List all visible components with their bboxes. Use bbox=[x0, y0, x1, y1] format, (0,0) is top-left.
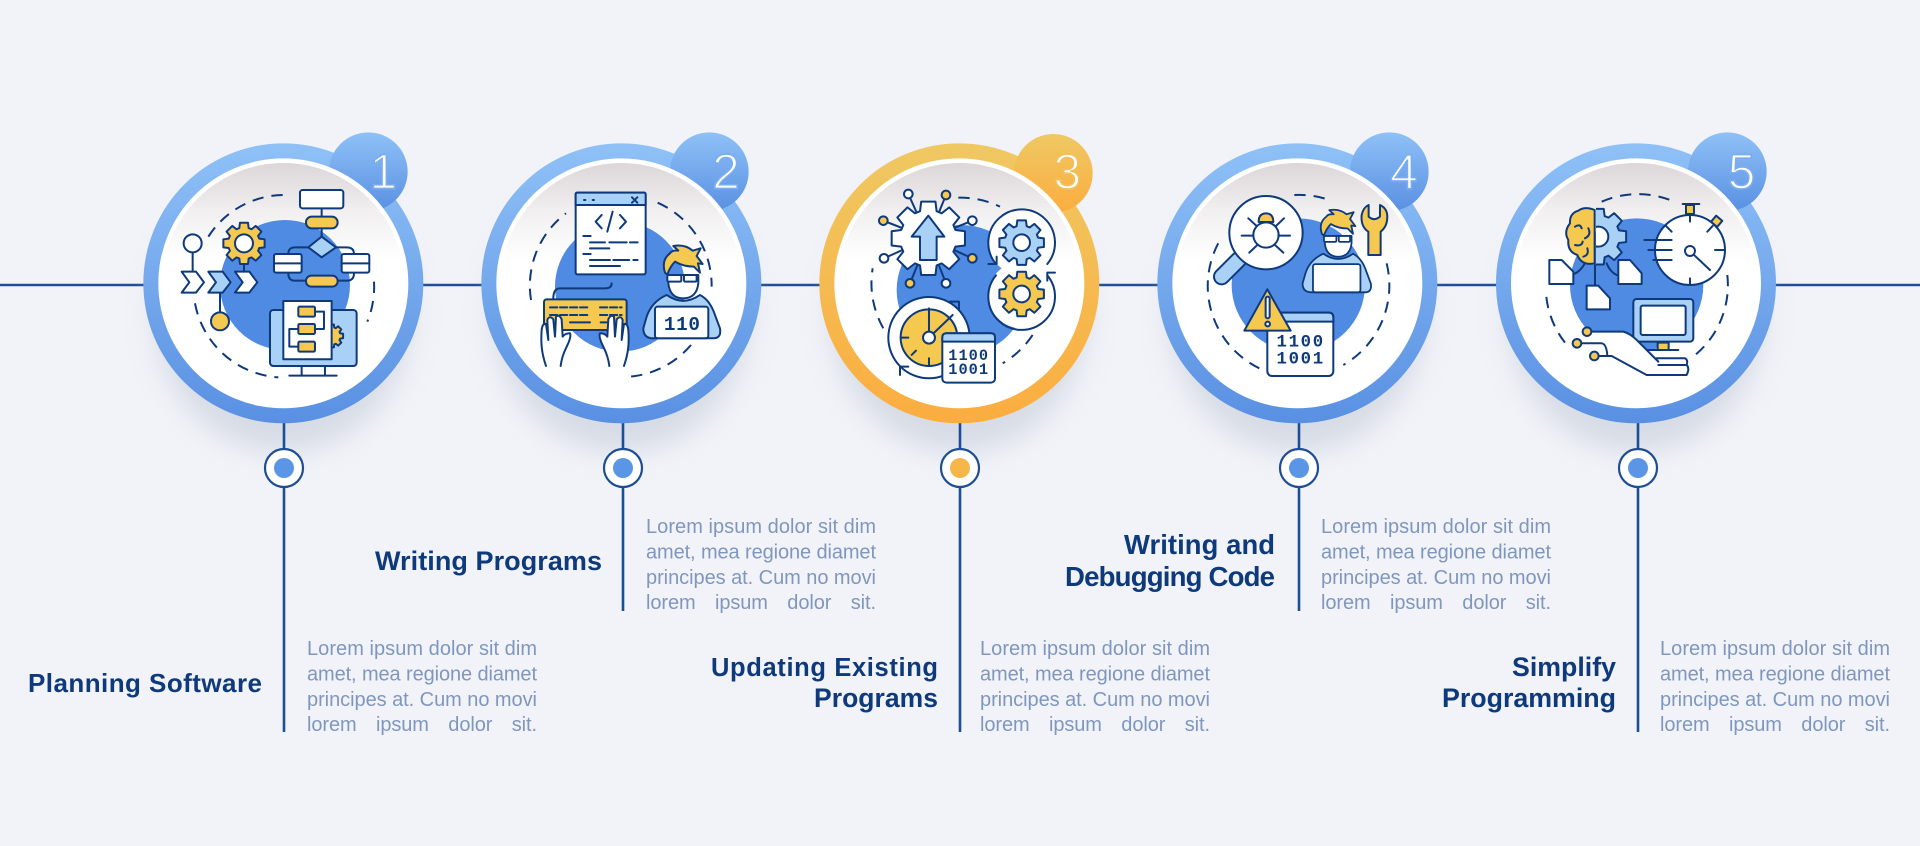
heading 4: Debugging Code bbox=[1065, 561, 1275, 592]
circle badge and icon 5: 5 bbox=[1728, 144, 1755, 199]
timeline line bbox=[0, 284, 1920, 286]
text block 5: lorem ipsum dolor sit. bbox=[1660, 714, 1890, 736]
circle badge and icon 3 bbox=[819, 134, 1099, 423]
text block 5 bbox=[1660, 638, 1890, 736]
circle shadow 2 bbox=[493, 176, 749, 452]
icon: bug search, developer and warning bbox=[1222, 196, 1387, 376]
circle shadow 1 bbox=[155, 176, 411, 452]
timeline node 3 bbox=[941, 449, 979, 487]
text block 1: amet, mea regione diamet bbox=[307, 664, 537, 686]
text block 3: principes at. Cum no movi bbox=[980, 689, 1210, 711]
circle badge and icon 4 bbox=[1157, 132, 1437, 423]
heading 5: Simplify bbox=[1512, 652, 1616, 682]
heading 5: Programming bbox=[1442, 683, 1616, 713]
circle shadow 4 bbox=[1169, 176, 1425, 452]
text block 4: Lorem ipsum dolor sit dim bbox=[1321, 516, 1551, 538]
text block 1: principes at. Cum no movi bbox=[307, 689, 537, 711]
connector stem 5 bbox=[1637, 420, 1639, 732]
panel: step 2 writing programs bbox=[375, 132, 876, 614]
connector stem 2 bbox=[622, 420, 624, 611]
text block 2 bbox=[646, 516, 876, 614]
text block 3: lorem ipsum dolor sit. bbox=[980, 714, 1210, 736]
text block 2: Lorem ipsum dolor sit dim bbox=[646, 516, 876, 538]
circle badge and icon 3: 1001 bbox=[948, 361, 989, 379]
heading 3 bbox=[711, 654, 938, 713]
circle badge and icon 1: 1 bbox=[370, 144, 397, 199]
text block 1: lorem ipsum dolor sit. bbox=[307, 714, 537, 736]
heading 3: Updating Existing bbox=[711, 654, 938, 682]
infographic canvas bbox=[0, 132, 1920, 735]
circle shadow 5 bbox=[1508, 176, 1764, 452]
heading 5 bbox=[1442, 652, 1616, 713]
text block 4: amet, mea regione diamet bbox=[1321, 542, 1551, 564]
heading 4 bbox=[1065, 529, 1275, 592]
text block 4: principes at. Cum no movi bbox=[1321, 567, 1551, 589]
heading 4: Writing and bbox=[1124, 529, 1275, 560]
timeline node 2 bbox=[604, 449, 642, 487]
panel: step 3 updating existing programs bbox=[711, 134, 1210, 736]
text block 5: Lorem ipsum dolor sit dim bbox=[1660, 638, 1890, 660]
text block 5: principes at. Cum no movi bbox=[1660, 689, 1890, 711]
text block 2: principes at. Cum no movi bbox=[646, 567, 876, 589]
circle badge and icon 4: 1001 bbox=[1277, 351, 1325, 370]
icon: update gear, cycle gears and clock bbox=[879, 190, 1055, 383]
heading 2: Writing Programs bbox=[375, 546, 602, 576]
connector stem 4 bbox=[1298, 420, 1300, 611]
icon: code window, keyboard and developer bbox=[541, 193, 720, 366]
text block 2: lorem ipsum dolor sit. bbox=[646, 592, 876, 614]
text block 1 bbox=[307, 638, 537, 736]
circle badge and icon 2: 110 bbox=[664, 314, 701, 336]
circle badge and icon 2: 2 bbox=[712, 144, 740, 199]
text block 3: amet, mea regione diamet bbox=[980, 664, 1210, 686]
connector stem 3 bbox=[959, 420, 961, 732]
circle badge and icon 5 bbox=[1496, 132, 1776, 423]
text block 1: Lorem ipsum dolor sit dim bbox=[307, 638, 537, 660]
circle badge and icon 2 bbox=[481, 132, 761, 423]
text block 3 bbox=[980, 638, 1210, 736]
circle badge and icon 4: 4 bbox=[1390, 144, 1418, 199]
circle badge and icon 3: 3 bbox=[1054, 144, 1081, 199]
text block 3: Lorem ipsum dolor sit dim bbox=[980, 638, 1210, 660]
circle badge and icon 4: 1100 bbox=[1277, 334, 1325, 353]
circle shadow 3 bbox=[831, 176, 1087, 452]
panel: step 5 simplify programming bbox=[1442, 132, 1890, 736]
timeline node 5 bbox=[1619, 449, 1657, 487]
heading 3: Programs bbox=[814, 683, 938, 713]
circle badge and icon 1 bbox=[143, 132, 423, 423]
text block 4: lorem ipsum dolor sit. bbox=[1321, 592, 1551, 614]
text block 5: amet, mea regione diamet bbox=[1660, 664, 1890, 686]
text block 4 bbox=[1321, 516, 1551, 614]
icon: flowchart and planning bbox=[182, 190, 369, 376]
panel: step 4 writing and debugging code bbox=[1065, 132, 1551, 614]
timeline node 4 bbox=[1280, 449, 1318, 487]
text block 2: amet, mea regione diamet bbox=[646, 542, 876, 564]
icon: brain gear, stopwatch, monitor and hand bbox=[1549, 204, 1725, 375]
timeline node 1 bbox=[265, 449, 303, 487]
panel: step 1 planning software bbox=[28, 132, 537, 736]
connector stem 1 bbox=[283, 420, 285, 732]
heading 1: Planning Software bbox=[28, 668, 262, 698]
circle badge and icon 3: 1100 bbox=[948, 347, 989, 365]
